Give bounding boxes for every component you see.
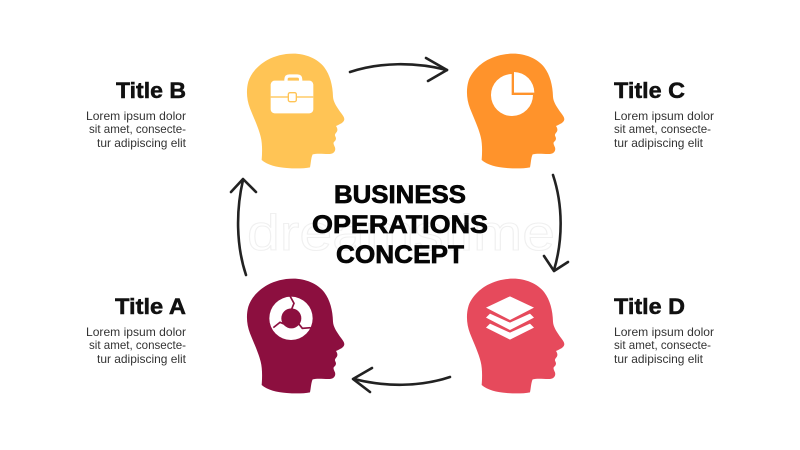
text block: Title C bbox=[614, 78, 714, 150]
panel: head A with cycle bbox=[247, 279, 344, 393]
text block: Title D: Lorem ipsum dolor bbox=[614, 325, 714, 339]
text block: Title B: sit amet, consecte- bbox=[89, 122, 186, 136]
title: business operations concept: BUSINESS bbox=[334, 181, 466, 209]
icon: pie chart bbox=[491, 72, 534, 116]
text block: Title B: Title B bbox=[116, 78, 186, 103]
text block: Title C: Lorem ipsum dolor bbox=[614, 109, 714, 123]
text block: Title B: Lorem ipsum dolor bbox=[86, 109, 186, 123]
text block: Title C: tur adipiscing elit bbox=[614, 136, 704, 150]
panel: head B with briefcase bbox=[247, 54, 344, 168]
icon: layers bbox=[486, 296, 534, 340]
text block: Title C: Title C bbox=[614, 78, 685, 103]
text block: Title A: tur adipiscing elit bbox=[97, 352, 187, 366]
panel: head C with pie chart bbox=[467, 54, 564, 168]
icon: briefcase bbox=[271, 76, 313, 113]
icon: cycle diagram bbox=[269, 296, 313, 340]
text block: Title C: sit amet, consecte- bbox=[614, 122, 711, 136]
arrow: A to B bbox=[231, 179, 256, 275]
text block: Title A: sit amet, consecte- bbox=[89, 338, 186, 352]
text block: Title A: Lorem ipsum dolor bbox=[86, 325, 186, 339]
text block: Title D bbox=[614, 294, 714, 366]
text block: Title D: sit amet, consecte- bbox=[614, 338, 711, 352]
arrow: D to A bbox=[353, 368, 450, 392]
watermark: dreamstime bbox=[247, 205, 555, 261]
panel: head D with layers bbox=[467, 279, 564, 393]
arrow: B to C bbox=[350, 58, 447, 81]
text block: Title B bbox=[86, 78, 187, 150]
text block: Title D: tur adipiscing elit bbox=[614, 352, 704, 366]
text block: Title D: Title D bbox=[614, 294, 685, 319]
title: business operations concept: OPERATIONS bbox=[312, 211, 488, 239]
title: business operations concept: CONCEPT bbox=[336, 241, 464, 269]
text block: Title A bbox=[86, 294, 187, 366]
title: business operations concept bbox=[312, 181, 488, 269]
arrow: C to D bbox=[544, 175, 568, 271]
text block: Title B: tur adipiscing elit bbox=[97, 136, 187, 150]
text block: Title A: Title A bbox=[115, 294, 186, 319]
